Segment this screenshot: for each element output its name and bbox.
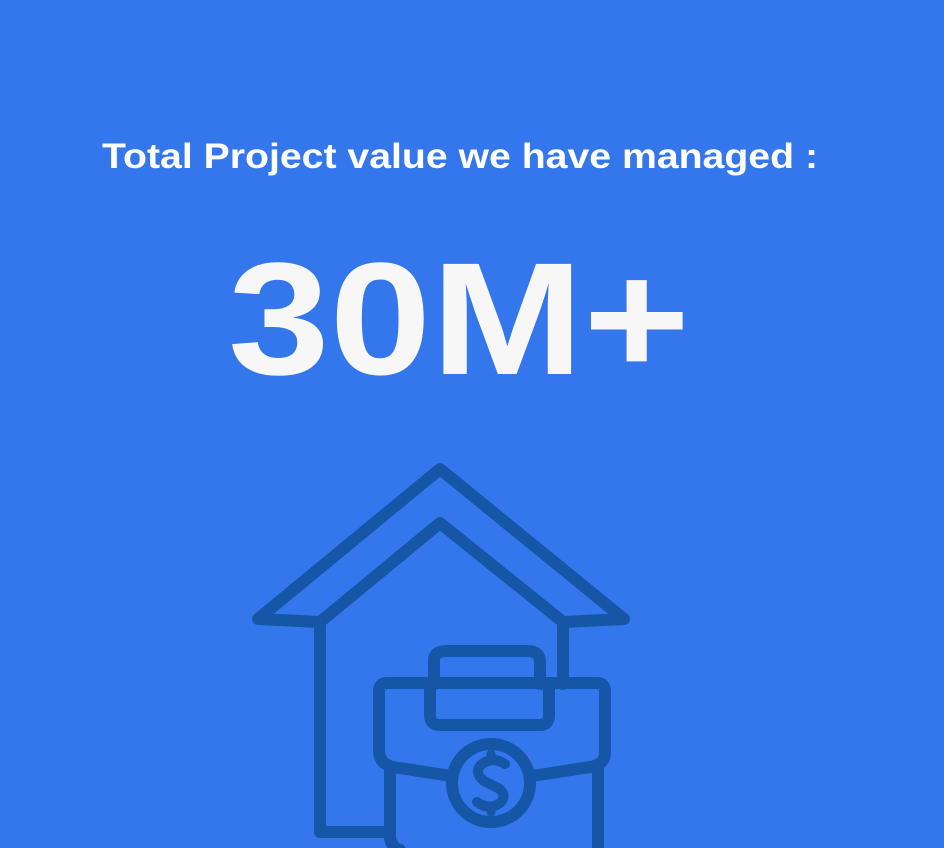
title: Total Project value we have managed : [102,137,818,176]
icon: house with briefcase and dollar [258,469,624,848]
big number: 30M+ [228,229,690,408]
